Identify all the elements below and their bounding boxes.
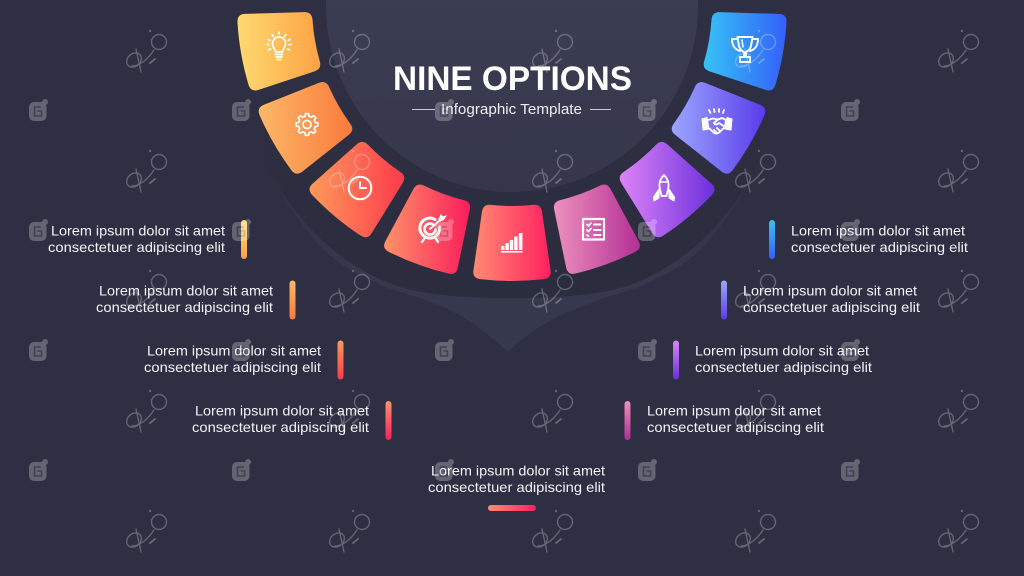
tile 6 [544, 180, 642, 278]
dark band behind tiles [264, 0, 760, 298]
tile 7 [610, 133, 718, 242]
legend right 4 [624, 401, 824, 440]
legend right 4: Lorem ipsum dolor sit amet [647, 402, 821, 418]
legend left 2 [96, 280, 296, 320]
legend bottom centre: Lorem ipsum dolor sit amet [431, 462, 605, 478]
tile 2 [255, 72, 359, 177]
legend right 2 [721, 280, 920, 320]
legend right 3: consectetuer adipiscing elit [695, 359, 872, 375]
icon: rocket [654, 175, 674, 201]
tile 5 [473, 205, 551, 281]
legend left 2: Lorem ipsum dolor sit amet [99, 282, 273, 298]
subtitle: Infographic Template [441, 101, 582, 118]
icon: trophy [732, 37, 758, 62]
title: NINE OPTIONS [393, 60, 632, 98]
icon: gear [296, 114, 318, 135]
legend right 4: consectetuer adipiscing elit [647, 419, 824, 435]
tile 8 [665, 72, 769, 177]
legend left 4: Lorem ipsum dolor sit amet [195, 402, 369, 418]
central disc [326, 0, 698, 192]
legend right 1: Lorem ipsum dolor sit amet [791, 222, 965, 238]
option tiles [234, 2, 790, 281]
legend bottom centre: consectetuer adipiscing elit [428, 479, 605, 495]
tile 4 [382, 180, 480, 278]
legend right 3: Lorem ipsum dolor sit amet [695, 342, 869, 358]
icon: target with arrow [420, 215, 446, 242]
legend right 2: Lorem ipsum dolor sit amet [743, 282, 917, 298]
legend left 1: consectetuer adipiscing elit [48, 239, 225, 255]
legend left 4: consectetuer adipiscing elit [192, 419, 369, 435]
icon: light bulb [267, 32, 291, 60]
legend left 3 [144, 340, 344, 380]
legend left 3: Lorem ipsum dolor sit amet [147, 342, 321, 358]
icon: bar chart [501, 233, 522, 253]
icon: clock [349, 177, 371, 199]
legend left 4 [192, 401, 392, 440]
tile 9 [701, 2, 790, 92]
icon: checklist [583, 219, 604, 240]
legend right 1 [769, 220, 968, 259]
crescent with pointed tip [264, 160, 760, 352]
tile 1 [234, 2, 323, 92]
legend right 2: consectetuer adipiscing elit [743, 299, 920, 315]
legend right 3 [673, 340, 872, 380]
legend left 1: Lorem ipsum dolor sit amet [51, 222, 225, 238]
icon: handshake [702, 109, 732, 134]
tile 3 [306, 133, 414, 242]
legend bottom centre [428, 462, 605, 511]
legend left 3: consectetuer adipiscing elit [144, 359, 321, 375]
legend left 2: consectetuer adipiscing elit [96, 299, 273, 315]
legend right 1: consectetuer adipiscing elit [791, 239, 968, 255]
legend left 1 [48, 220, 247, 259]
